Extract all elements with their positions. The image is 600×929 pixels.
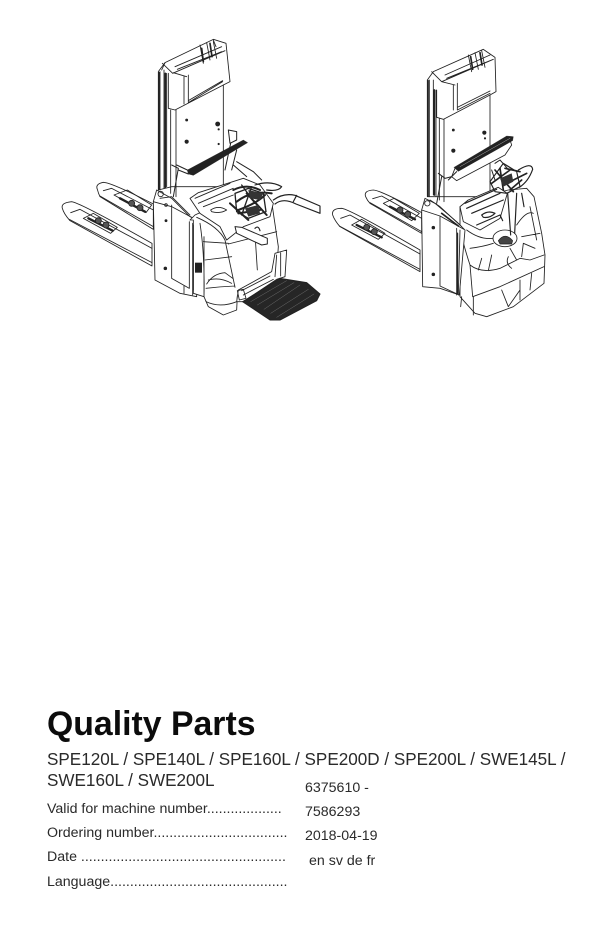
title: Quality Parts [47,705,256,743]
grab bar [452,140,512,181]
body details in crop coordinates [190,178,320,320]
value: languages: en sv de fr [309,853,375,869]
field: ordering number: Ordering number.................................. [47,825,287,841]
mast housing front [422,198,465,295]
grab bar [187,140,248,175]
field: date: Date .................................................... [47,849,286,865]
field: valid for machine number: Valid for machine number................... [47,801,282,817]
model list: SPE120L / SPE140L / SPE160L / SPE200D / SPE200L / SWE145L / [47,750,566,769]
field: language: Language............................................. [47,874,288,890]
body details in crop coordinates [422,160,545,317]
illustration: stacker with platform [62,39,320,320]
value: machine number start: 6375610 - [305,780,369,796]
illustration: stacker with tiller [333,49,545,317]
model list [47,750,566,790]
value: date: 2018-04-19 [305,828,378,844]
value: ordering number: 7586293 [305,804,360,820]
model list: SWE160L / SWE200L [47,771,215,790]
illustrations: two pallet stackers [62,38,546,320]
front mast housing [153,190,197,297]
